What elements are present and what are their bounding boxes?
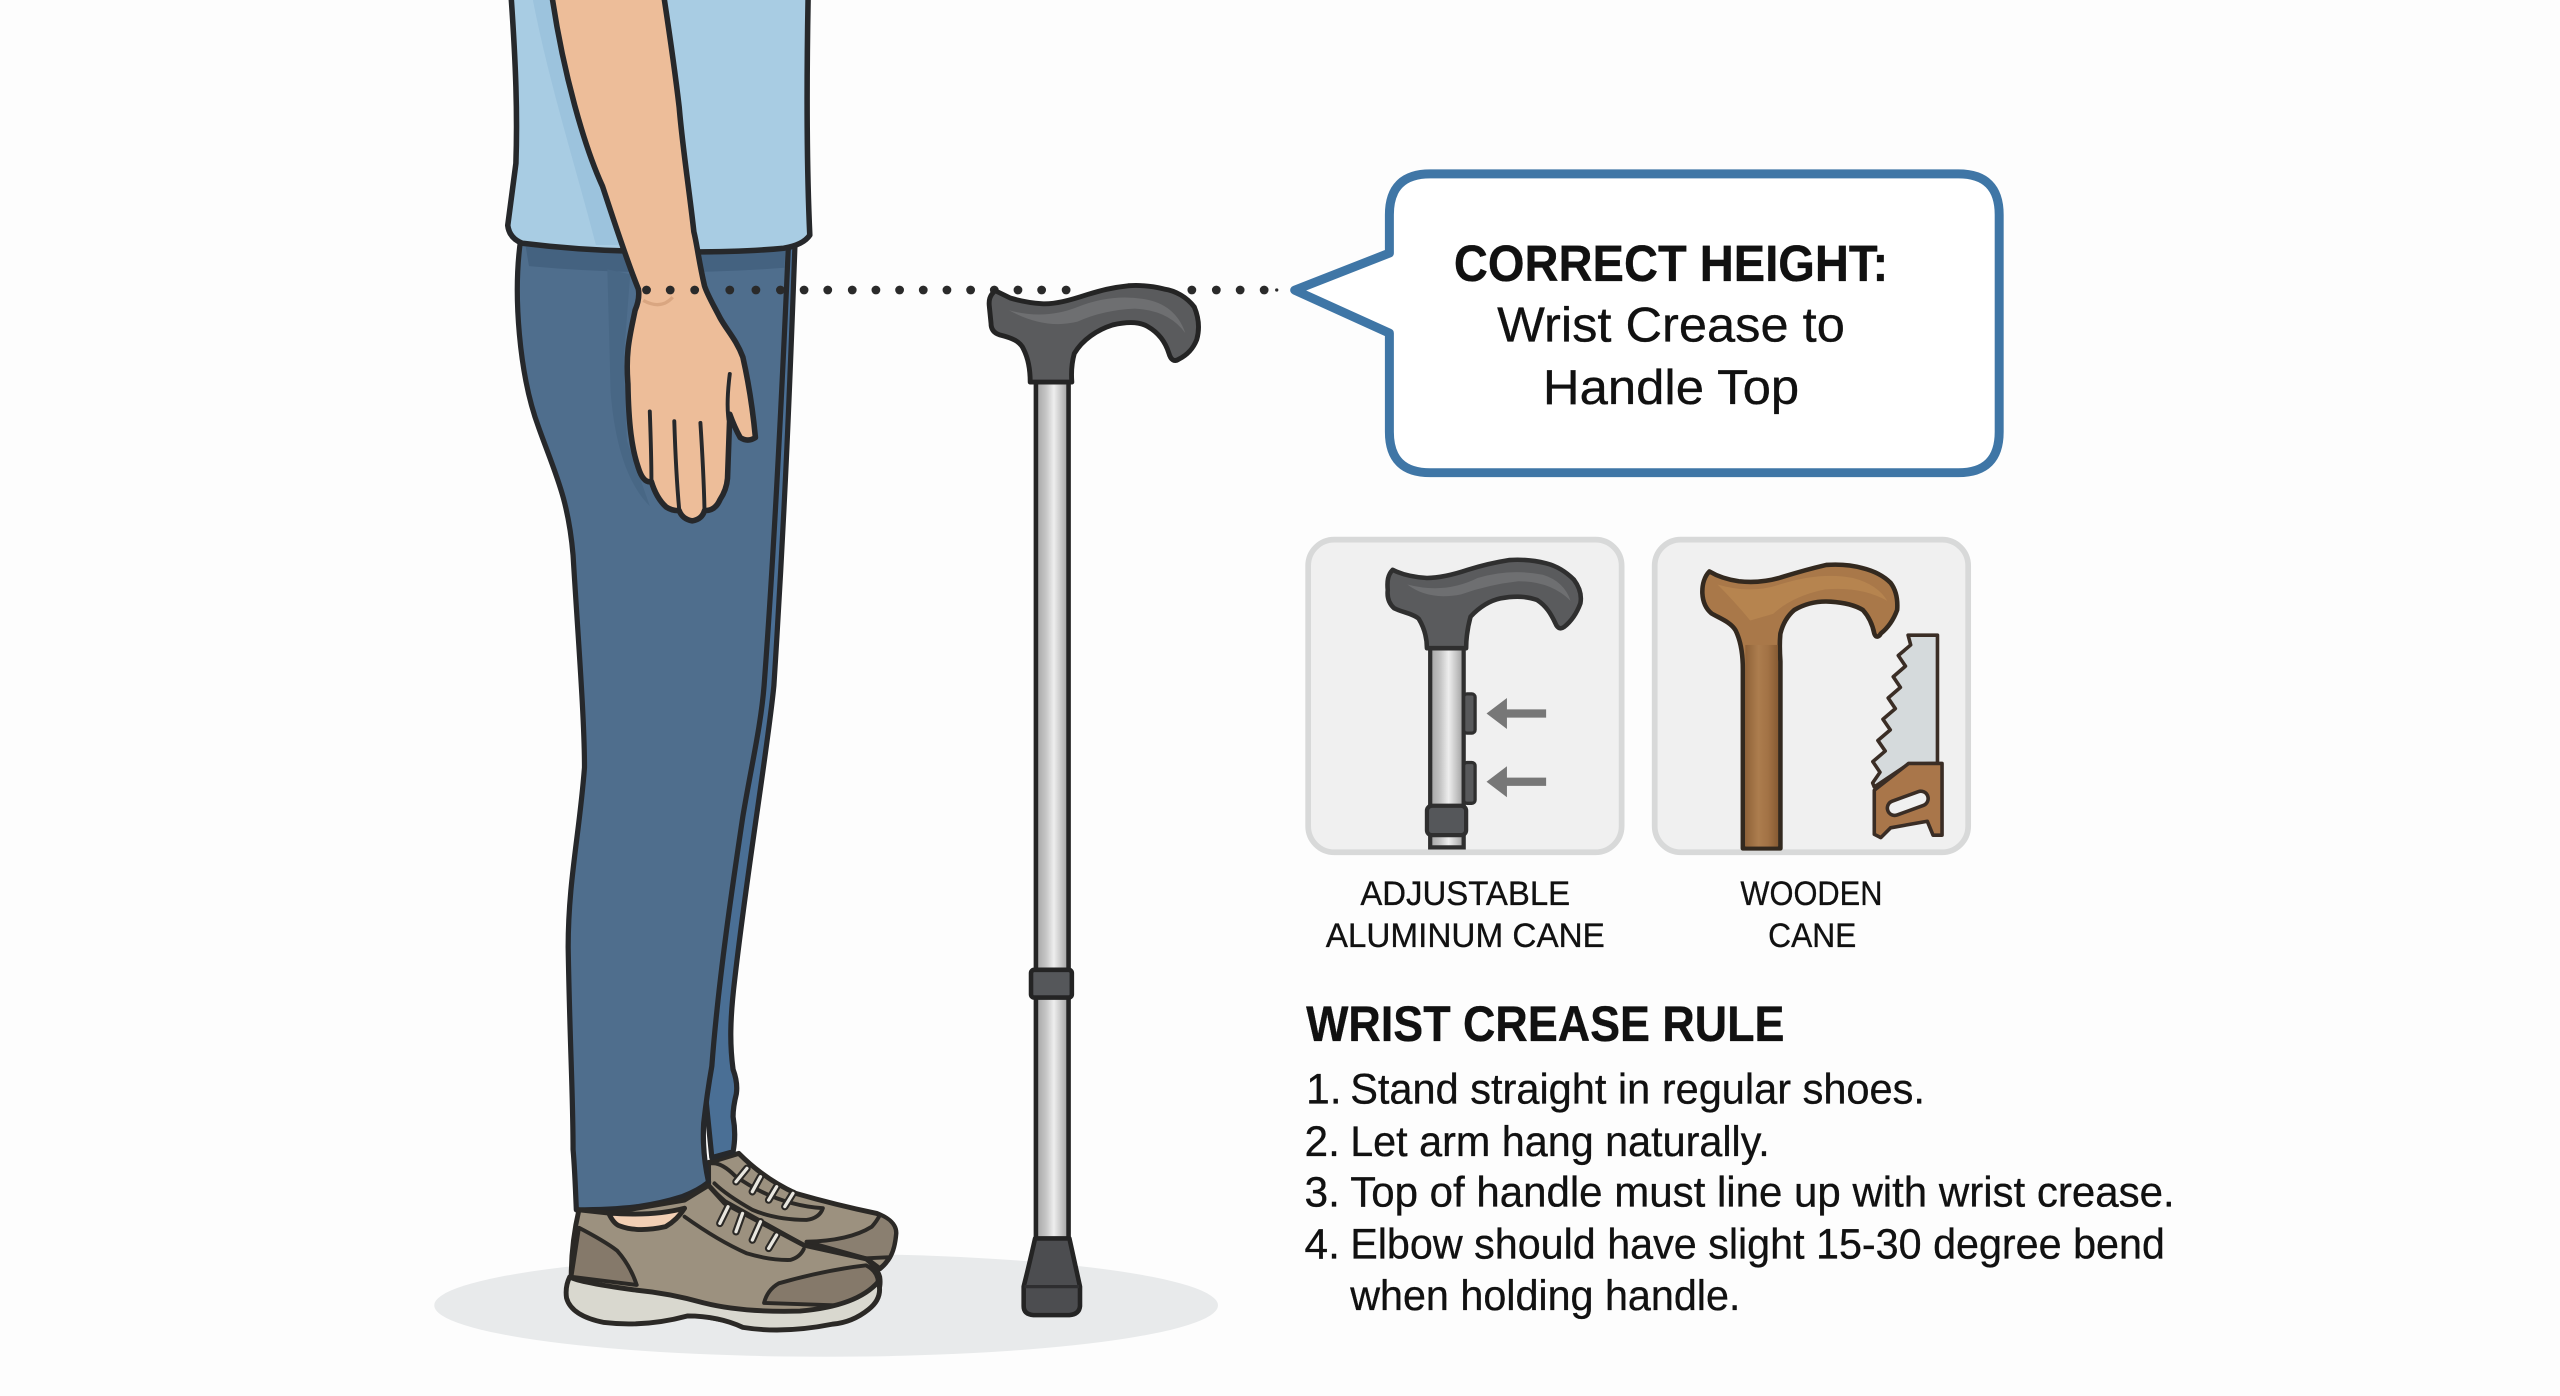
hand details [650, 374, 730, 509]
panel: wooden cane and saw [1655, 540, 1968, 852]
text block: numbered steps: Elbow should have slight 15-30 degree bend [1350, 1220, 2165, 1267]
callout: correct height [1295, 174, 1999, 473]
dotted measurement line [642, 286, 1278, 294]
callout: correct height: Handle Top [1543, 361, 1799, 415]
label: adjustable aluminum cane: ALUMINUM CANE [1326, 917, 1605, 955]
text block: numbered steps: Top of handle must line up with wrist crease. [1350, 1169, 2175, 1216]
back shoe laces [736, 1168, 793, 1207]
saw [1873, 635, 1942, 838]
label: adjustable aluminum cane [1326, 875, 1605, 955]
cane shaft [1036, 379, 1069, 1244]
label: wooden cane: WOODEN [1740, 875, 1882, 913]
arm and hand [552, 0, 755, 521]
pants shading [526, 247, 785, 272]
callout: correct height: CORRECT HEIGHT: [1454, 234, 1888, 292]
wood grain [1745, 645, 1778, 847]
arrow: upper clip [1487, 698, 1546, 729]
cane handle [989, 285, 1198, 382]
front shoe laces [720, 1207, 777, 1248]
ground shadow [434, 1254, 1218, 1357]
arrow: lower clip [1487, 766, 1546, 797]
text block: numbered steps: 1. [1306, 1066, 1342, 1113]
text block: numbered steps: 3. [1304, 1169, 1340, 1216]
shirt [508, 0, 810, 252]
text block: numbered steps: 2. [1304, 1118, 1340, 1165]
label: wooden cane [1740, 875, 1882, 955]
callout: correct height: Wrist Crease to [1497, 299, 1845, 353]
label: adjustable aluminum cane: ADJUSTABLE [1360, 875, 1570, 913]
cane rubber tip [1024, 1238, 1080, 1315]
label: wooden cane: CANE [1768, 917, 1856, 955]
text block: numbered steps [1304, 1066, 2175, 1319]
aluminum shaft [1430, 645, 1464, 847]
heading: wrist crease rule: WRIST CREASE RULE [1306, 996, 1784, 1052]
aluminum handle [1387, 560, 1581, 648]
panel: adjustable aluminum cane [1308, 540, 1622, 852]
collar [1427, 806, 1466, 835]
shirt shading [532, 0, 622, 245]
person figure [508, 0, 896, 1330]
pants [517, 238, 795, 1210]
adjustment clips [1464, 694, 1475, 803]
text block: numbered steps: when holding handle. [1349, 1272, 1740, 1319]
cane collar [1031, 970, 1072, 998]
front shoe [566, 1185, 880, 1330]
text block: numbered steps: Stand straight in regular shoes. [1350, 1066, 1925, 1113]
full-length cane [989, 285, 1198, 1315]
text block: numbered steps: 4. [1304, 1220, 1340, 1267]
text block: numbered steps: Let arm hang naturally. [1350, 1118, 1770, 1165]
wooden cane [1702, 565, 1897, 848]
back shoe [709, 1153, 896, 1269]
